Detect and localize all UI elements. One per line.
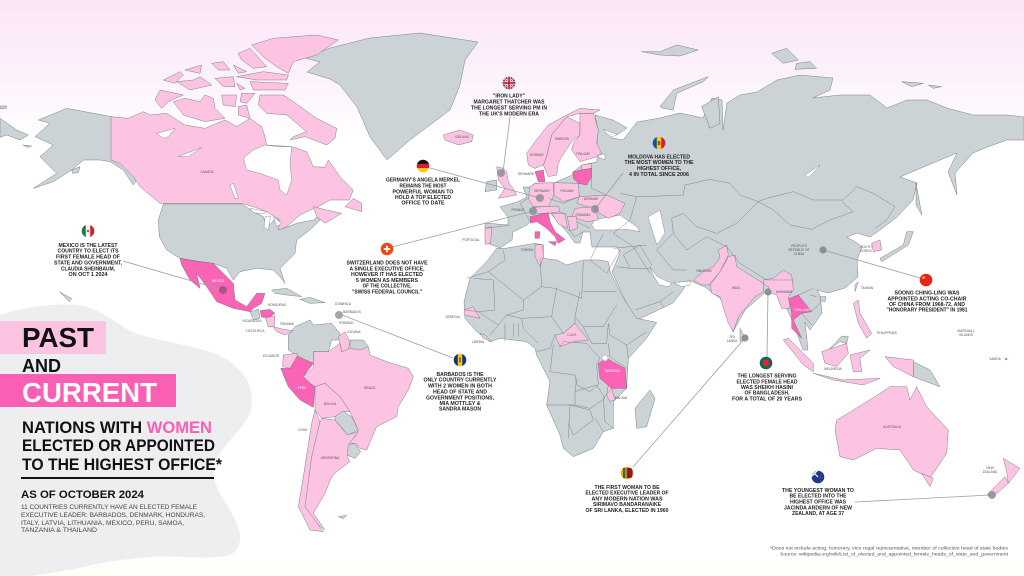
text: China: OF CHINA FROM 1968-72, AND [889,302,965,308]
map: Thailand [789,295,812,338]
country labels: PAKISTAN [696,269,712,273]
text: China [886,291,968,314]
map: Samoa dot [1005,358,1007,360]
map: hot pink countries of Europe [530,168,592,246]
country labels: C.A.R. [567,333,577,337]
country labels: INDIA [732,286,741,290]
text: Barbados: GOVERNMENT POSITIONS, [426,395,495,401]
country labels: ECUADOR [263,354,280,358]
map: Iceland [443,130,473,145]
country labels: KOREA [860,249,872,253]
country labels: HONDURAS [268,303,286,307]
icon: flag of Barbados [454,354,466,366]
callout: United Kingdom [471,76,547,177]
map: Mexico [180,258,265,312]
current leaders text [21,505,205,534]
country labels: NICARAGUA [243,319,262,323]
footnote and source [770,546,1009,556]
country labels: SRI [729,335,735,339]
country labels: GERMANY [534,189,551,193]
text: UK: MARGARET THATCHER WAS [474,99,545,105]
country labels: FRANCE [511,208,525,212]
text: Germany [386,177,461,207]
country labels: LANKA [727,339,738,343]
text: China: APPOINTED ACTING CO-CHAIR [888,296,967,302]
map: seas inside Eurasia [648,165,820,245]
callout: New Zealand [782,470,996,517]
text: New Zealand: HIGHEST OFFICE WAS [790,499,846,505]
map: light pink countries of the Americas [265,316,413,532]
text: New Zealand: BE ELECTED INTO THE [790,494,847,500]
text: China: "HONORARY PRESIDENT" IN 1981 [886,308,968,314]
country labels: REPUBLIC OF [788,248,810,252]
country labels: TAIWAN [861,286,874,290]
map: Tanzania [598,358,627,388]
map: African light pink countries [464,244,615,402]
text: Sri Lanka: OF SRI LANKA, ELECTED IN 1960 [586,508,669,514]
country labels: LIBERIA [472,340,485,344]
text: Sri Lanka: THE FIRST WOMAN TO BE [594,485,660,491]
text: New Zealand: ZEALAND, AT AGE 37 [792,511,844,517]
title: CURRENT band [0,374,176,407]
text: Germany: OFFICE TO DATE [402,201,445,207]
text: Moldova [624,154,694,178]
map: Lake Victoria [602,355,608,361]
text: Bangladesh [732,374,802,403]
title: PAST: PAST [22,322,94,353]
map: hot pink countries of the Americas [260,309,315,407]
text: Bangladesh: ELECTED FEMALE HEAD [736,379,798,385]
subtitle line 2: ELECTED OR APPOINTED [22,437,215,455]
country labels: BOLIVIA [324,402,337,406]
text: Moldova: HIGHEST OFFICE, [637,166,681,172]
country labels on hot pink countries: MEXICO [212,279,225,283]
icon: flag of Germany [416,160,430,172]
icon: flag of Bangladesh [760,357,772,369]
current leaders text: EXECUTIVE LEADER: BARBADOS, DENMARK, HONDURAS, [21,513,205,519]
map: Canadian lakes and Hudson Bay [157,128,292,230]
map: Greenland [305,33,478,160]
country labels: NEW [986,466,994,470]
country labels: NORWAY [530,153,545,157]
map: European minor borders [487,177,607,237]
text: Barbados: BARBADOS IS THE [436,372,484,378]
country labels: SAMOA [989,357,1002,361]
text: Switzerland: HOWEVER IT HAS ELECTED [351,272,423,278]
callout: Sri Lanka [586,334,749,514]
text: Bangladesh: FOR A TOTAL OF 20 YEARS [732,397,802,403]
text: Switzerland: SWITZERLAND DOES NOT HAVE [346,260,428,266]
country labels: FINLAND [576,152,591,156]
map: Persian Gulf and Gulf of Oman [650,267,690,287]
icon: flag of New Zealand [812,470,824,484]
text: UK: THE LONGEST SERVING PM IN [471,105,547,111]
text: Barbados: HEAD OF STATE AND [433,389,487,395]
map: Africa and Madagascar [464,243,657,457]
text: Moldova: 4 IN TOTAL SINCE 2006 [629,172,689,178]
country labels: SWEDEN [555,137,570,141]
country labels: GUYANA [347,330,361,334]
text: Switzerland: 5 WOMEN AS MEMBERS [356,278,418,284]
panel: title blob [0,305,252,576]
text: Barbados [424,372,497,413]
country labels: DOMINICA [335,302,352,306]
country labels: ISLANDS [959,333,973,337]
country labels on hot pink countries [212,279,811,390]
country labels: ROMANIA [576,213,591,217]
blob background [0,305,252,576]
callout: Switzerland [346,207,537,295]
country labels: ICELAND [455,135,470,139]
text: Sri Lanka: ELECTED EXECUTIVE LEADER OF [586,491,669,497]
callout: China [819,246,968,314]
country labels on hot pink countries: THAILAND [794,308,811,312]
country labels: DENMARK [518,172,535,176]
country labels: UKRAINE [584,197,598,201]
map: South America gray regions [288,320,368,519]
country labels: MYANMAR [776,290,793,294]
text: Sri Lanka: ANY MODERN NATION WAS [592,496,663,502]
subtitle line 3: TO THE HIGHEST OFFICE* [22,456,223,474]
text: Mexico: COUNTRY TO ELECT ITS [58,249,119,255]
country labels: CHINA [794,252,805,256]
country labels: COSTA RICA [245,329,265,333]
text: New Zealand [782,488,854,517]
country labels: PHILIPPINES [877,331,897,335]
text: Barbados: ONLY COUNTRY CURRENTLY [424,378,497,384]
text: Switzerland: "SWISS FEDERAL COUNCIL" [352,289,422,295]
country labels: BARBADOS [343,310,361,314]
country labels: ZEALAND [983,470,998,474]
country labels: TRINIDAD [338,321,354,325]
text: Barbados: SANDRA MASON [439,407,481,413]
country labels on hot pink countries: TANZANIA [604,369,621,373]
map: light pink countries of Europe [485,108,625,244]
map: Southeast Asian minor borders [798,288,822,325]
country labels: SENEGAL [445,315,461,319]
text: Switzerland: A SINGLE EXECUTIVE OFFICE, [350,266,425,272]
country labels: TUNISIA [521,248,534,252]
current leaders text: 11 COUNTRIES CURRENTLY HAVE AN ELECTED FEMALE [21,505,197,511]
text: Germany: GERMANY'S ANGELA MERKEL [386,177,461,183]
text: Moldova: THE MOST WOMEN TO THE [624,160,694,166]
icon: flag of UK [502,76,516,90]
country labels [200,135,1002,474]
map: African and Middle Eastern borders [465,245,673,438]
subtitle line 1: NATIONS WITH WOMEN [22,419,212,437]
text: Germany: REMAINS THE MOST [400,183,447,189]
text: China: SOONG CHING-LING WAS [894,291,960,297]
map: Eurasian borders [590,179,895,280]
text: Mexico: CLAUDIA SHEINBAUM, [61,266,115,272]
footnote and source: *Does not include acting, honorary, vice regal representative, member of collective head of state bodies [770,546,1008,550]
footnote and source: Source: wikipedia.org/wiki/List_of_elected_and_appointed_female_heads_of_state_and_government [780,552,1009,556]
text: UK: THE UK'S MODERN ERA [479,111,539,117]
text: Sri Lanka: SIRIMAVO BANDARANAIKE [593,502,661,508]
text: Sri Lanka [586,485,669,514]
country labels: POLAND [560,189,574,193]
country labels: INDONESIA [824,367,843,371]
map: Arctic Russian islands [642,45,942,128]
country labels: PORTUGAL [462,238,480,242]
text: Mexico [54,243,123,278]
icon: flag of China [920,274,932,286]
text: Germany: HOLD A TOP ELECTED [395,195,451,201]
map: Canada [111,35,362,230]
icon: flag of Sri Lanka [620,466,634,480]
country labels: BRAZIL [364,386,376,390]
icon: flag of Switzerland [381,243,393,255]
text: UK [471,93,547,117]
country labels: CANADA [200,170,215,174]
country labels on hot pink countries: PERU [298,386,307,390]
country labels: PEOPLE'S [791,244,807,248]
text: Mexico: ON OCT 1 2024 [68,272,108,278]
text: Moldova: MOLDOVA HAS ELECTED [628,154,690,160]
callout: Barbados [335,311,497,413]
text: New Zealand: JACINDA ARDERN OF NEW [784,505,852,511]
icon: flag of Moldova [652,136,666,150]
country labels: SOUTH [860,245,872,249]
map: Asia light pink countries [693,240,882,385]
map: Papua New Guinea [913,362,940,387]
text: Mexico: STATE AND GOVERNMENT, [54,260,123,266]
text: Barbados: WITH 2 WOMEN IN BOTH [428,384,492,390]
map: Sakhalin [916,183,922,215]
title: AND: AND [22,356,61,376]
map: Black Sea and Ladoga [592,129,640,232]
country labels: CHILE [298,428,308,432]
text: Barbados: MIA MOTTLEY & [440,401,481,407]
text: Bangladesh: THE LONGEST SERVING [738,374,796,380]
callout: Moldova [591,136,694,213]
map: Oceania light pink countries [835,357,1020,497]
text: Mexico: FIRST FEMALE HEAD OF [56,254,121,260]
map: Ireland [485,180,497,192]
callout: Bangladesh [732,288,802,403]
current leaders text: ITALY, LATVIA, LITHUANIA, MEXICO, PERU, SAMOA, [21,521,184,527]
text: Germany: POWERFUL WOMAN TO [392,189,454,195]
current leaders text: TANZANIA & THAILAND [21,528,98,534]
text: Bangladesh: OF BANGLADESH, [744,391,790,397]
map: Japan and Southeast Asian gray islands [820,232,913,350]
country labels: MALAWI [615,396,627,400]
date heading: AS OF OCTOBER 2024 [21,489,145,501]
map: North America gray regions [0,106,325,320]
country labels: ARGENTINA [321,456,340,460]
country labels: AUSTRALIA [883,425,902,429]
text: Switzerland [346,260,428,295]
text: Mexico: MEXICO IS THE LATEST [58,243,118,249]
callout: Germany [386,159,544,207]
map: Eurasia landmass [485,75,1024,350]
country labels: PANAMA [280,322,294,326]
title: PAST band [0,321,106,354]
text: Switzerland: OF THE COLLECTIVE, [362,284,412,290]
text: UK: "IRON LADY" [493,93,525,99]
text: Bangladesh: WAS SHEIKH HASINI [741,385,794,391]
title: CURRENT: CURRENT [22,377,157,408]
callout: Mexico [54,224,227,294]
icon: flag of Mexico [82,225,94,237]
country labels: MARSHALL [957,329,975,333]
text: New Zealand: THE YOUNGEST WOMAN TO [782,488,854,494]
